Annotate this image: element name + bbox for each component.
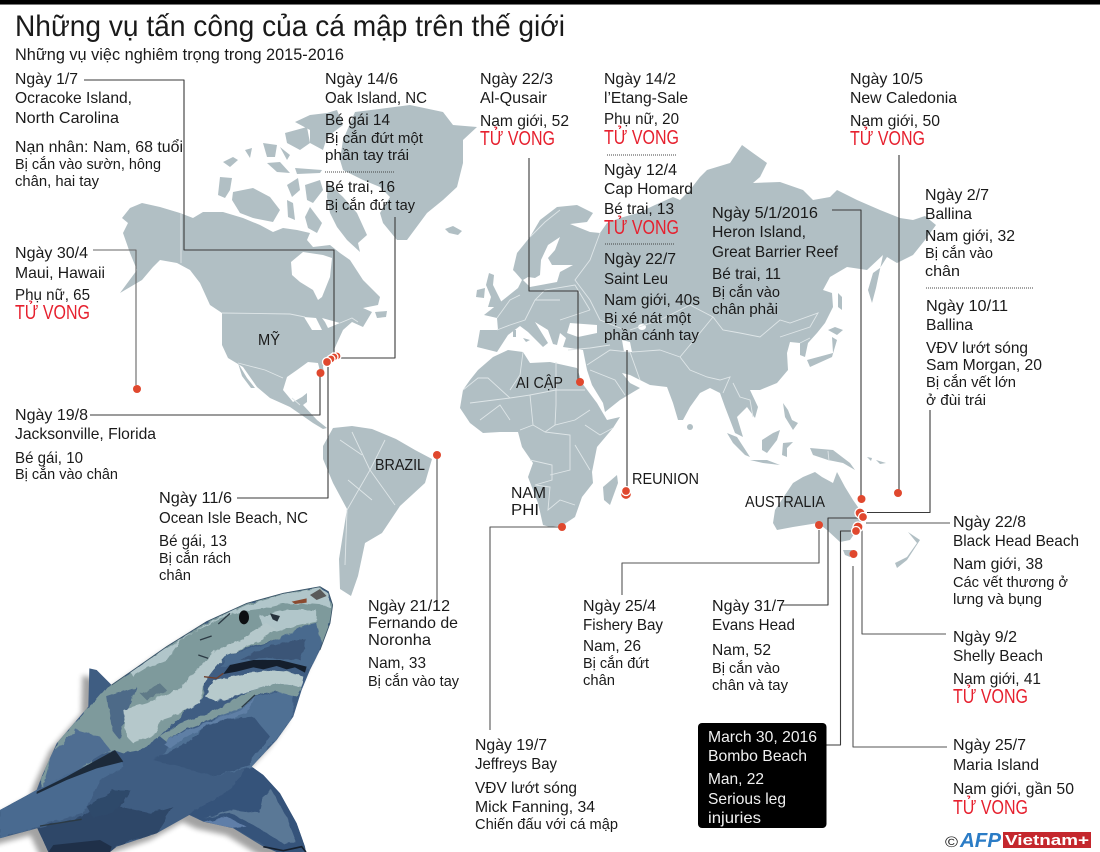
text block: Black Head Beach: Black Head Beach [953,533,1079,550]
shark illustration [0,587,333,852]
country borders [181,210,829,565]
text block: Ocracoke Island [15,71,183,190]
text block: New Caledonia: TỬ VONG [850,126,925,150]
text block: Al-Qusair [480,71,569,150]
text block: Ocracoke Island: chân, hai tay [15,173,99,190]
text block: Ocracoke Island: Bị cắn vào sườn, hông [15,156,161,173]
text block: Maui [15,245,105,324]
text block: Jeffreys Bay: Ngày 19/7 [475,737,547,754]
text block: Ocean Isle Beach: Ngày 11/6 [159,490,232,507]
text block: Fishery Bay: Ngày 25/4 [583,598,656,615]
text block: Ocean Isle Beach: chân [159,567,191,584]
shark body group [0,587,333,852]
country labels: BRAZIL [375,457,425,474]
text block: Ballina [925,187,1042,409]
title: Những vụ tấn công của cá mập trên thế giới [15,10,565,43]
text block: Ocean Isle Beach: Bị cắn rách [159,550,231,567]
text block: Jacksonville: Jacksonville, Florida [15,426,156,443]
shark shadow [0,594,326,852]
credit logos: © [945,834,958,851]
text block: Oak Island [325,71,427,214]
text block: Ocean Isle Beach [159,490,308,584]
credit logos: AFP [959,830,1002,852]
text block: Maui: Maui, Hawaii [15,265,105,282]
text block: Ballina: Ngày 10/11 [926,298,1008,315]
shark base [0,587,333,852]
text block: Evans Head: Ngày 31/7 [712,598,785,615]
shark scars [40,613,255,826]
Southeast Asia islands [783,403,798,430]
shark gill [37,750,123,794]
text block: Ocean Isle Beach: Ocean Isle Beach, NC [159,510,308,527]
text block: Jacksonville: Bé gái, 10 [15,450,83,467]
text block: Fishery Bay: Nam, 26 [583,638,641,655]
text block: Reunion incidents: Cap Homard [604,181,693,198]
text block: Maui: Phụ nữ, 65 [15,287,90,304]
text block: Ballina: Ngày 2/7 [925,187,989,204]
country labels: AUSTRALIA [745,494,825,511]
callout: Bombo Beach: injuries [708,810,761,827]
text block: Ballina: VĐV lướt sóng [926,340,1028,357]
British Isles [486,273,502,307]
Baja California [238,363,255,388]
shark outline [112,587,333,685]
text block: Oak Island: Bị cắn đứt một [325,130,424,147]
text block: Reunion incidents: Bé trai, 13 [604,201,674,218]
text block: Reunion incidents [604,71,700,344]
text block: Fernando de Noronha: Fernando de [368,615,458,632]
text block: Fernando de Noronha: Nam, 33 [368,655,426,672]
text block: Reunion incidents: Ngày 12/4 [604,162,677,179]
text block: Fernando de Noronha: Noronha [368,632,431,649]
text block: Fernando de Noronha [368,598,459,690]
North America [120,203,380,429]
subtitle: Những vụ việc nghiêm trọng trong 2015-2016 [15,46,344,64]
text block: Reunion incidents: Nam giới, 40s [604,292,700,309]
text block: Heron Island: chân phải [712,301,778,318]
text block: Ocracoke Island: Ngày 1/7 [15,71,78,88]
text block: Reunion incidents: phần cánh tay [604,327,699,344]
text block: Reunion incidents: Phụ nữ, 20 [604,111,679,128]
text block: Reunion incidents: TỬ VONG [604,125,679,149]
text block: Fishery Bay [583,598,663,689]
text block: Reunion incidents: Ngày 14/2 [604,71,676,88]
text block: Maria Island: Ngày 25/7 [953,737,1026,754]
text block: New Caledonia: Nam giới, 50 [850,113,940,130]
text block: Maria Island: Nam giới, gần 50 [953,781,1074,798]
text block: Heron Island: Heron Island, [712,224,806,241]
callout: Bombo Beach [698,723,826,828]
text block: Ocracoke Island: Ocracoke Island, [15,90,132,107]
text block: Ballina: Bị cắn vào [925,245,993,262]
text block: Fishery Bay: Fishery Bay [583,617,663,634]
text block: Al-Qusair: Ngày 22/3 [480,71,553,88]
shark tonal patches [0,587,333,852]
shark nostril [270,613,280,622]
text block: New Caledonia: New Caledonia [850,90,957,107]
country labels: NAM [511,485,546,502]
text block: Oak Island: Bé gái 14 [325,112,390,129]
Australia [773,472,862,542]
Mediterranean islands [523,338,530,342]
text block: Evans Head: chân và tay [712,677,788,694]
text block: Ocean Isle Beach: Bé gái, 13 [159,533,227,550]
text block: Shelly Beach: Ngày 9/2 [953,629,1017,646]
credit logos [945,830,1091,852]
Arctic islands [218,177,232,198]
text block: New Caledonia: Ngày 10/5 [850,71,923,88]
text block: Fernando de Noronha: Ngày 21/12 [368,598,450,615]
text block: Reunion incidents: Saint Leu [604,271,668,288]
text block: Oak Island: Bé trai, 16 [325,179,395,196]
shark fin edge [263,847,306,852]
text block: Shelly Beach: Nam giới, 41 [953,671,1041,688]
text block: Oak Island: Oak Island, NC [325,90,427,107]
text block: Al-Qusair: TỬ VONG [480,126,555,150]
text block: Fishery Bay: Bị cắn đứt [583,655,650,672]
Eurasia [477,145,936,437]
text block: Maria Island: Maria Island [953,757,1039,774]
leader lines [84,80,950,747]
Greenland [340,105,477,240]
country labels [258,329,825,519]
text block: Shelly Beach: Shelly Beach [953,648,1043,665]
text block: Fernando de Noronha: Bị cắn vào tay [368,673,459,690]
Africa [460,350,620,527]
text block: Shelly Beach: TỬ VONG [953,684,1028,708]
text block: Evans Head [712,598,795,694]
text block: Ballina: ở đùi trái [926,392,986,409]
text block: Reunion incidents: TỬ VONG [604,215,679,239]
text block: Black Head Beach: Các vết thương ở [953,574,1068,591]
text block: Oak Island: phần tay trái [325,147,409,164]
text block: Evans Head: Nam, 52 [712,642,771,659]
text block: Evans Head: Bị cắn vào [712,660,780,677]
text block: Maria Island [953,737,1074,819]
text block: Jeffreys Bay [475,737,618,833]
text block: Oak Island: Ngày 14/6 [325,71,398,88]
shark eye [239,610,249,624]
text block: Al-Qusair: Nam giới, 52 [480,113,569,130]
callout: Bombo Beach: Bombo Beach [708,748,807,765]
shark mouth corner [204,673,223,678]
text block: Ballina: Bị cắn vết lớn [926,374,1016,391]
South America [323,426,432,596]
text block: Jacksonville [15,407,156,483]
text block: Heron Island: Great Barrier Reef [712,244,839,261]
text block: Ballina: chân [925,263,960,280]
text block: Reunion incidents: l’Etang-Sale [604,90,688,107]
text block: Jeffreys Bay: Jeffreys Bay [475,756,557,773]
text block: Jeffreys Bay: VĐV lướt sóng [475,780,577,797]
country labels: MỸ [258,329,280,349]
Iceland [445,226,462,235]
text block: Black Head Beach: Ngày 22/8 [953,514,1026,531]
country labels: PHI [511,502,539,519]
text block: Fishery Bay: chân [583,672,615,689]
callout: Bombo Beach: Serious leg [708,791,786,808]
text block: Shelly Beach [953,629,1043,708]
Newfoundland [375,311,387,318]
text block: Heron Island: Bé trai, 11 [712,266,781,283]
text block: Black Head Beach: Nam giới, 38 [953,556,1043,573]
shark mouth [223,660,307,674]
text block: Ballina: Ballina [925,206,972,223]
shark belly tip [48,840,112,852]
lakes and inland seas [291,237,646,352]
Madagascar [603,475,618,505]
incident markers [133,352,902,558]
text block: Black Head Beach [953,514,1079,608]
callout: Bombo Beach: Man, 22 [708,771,764,788]
text block: Ballina: Sam Morgan, 20 [926,357,1042,374]
New Zealand [895,532,920,568]
country labels: REUNION [632,471,699,488]
text block: Reunion incidents: Ngày 22/7 [604,251,676,268]
text block: Heron Island: Ngày 5/1/2016 [712,205,818,222]
text block: Jeffreys Bay: Mick Fanning, 34 [475,799,595,816]
text block: Black Head Beach: lưng và bụng [953,591,1042,608]
callout: Bombo Beach: March 30, 2016 [708,729,817,746]
text block: Al-Qusair: Al-Qusair [480,90,548,107]
Sakhalin and Japan [838,293,842,310]
text block: Jacksonville: Bị cắn vào chân [15,466,118,483]
shark wounds [292,589,327,604]
text block: Ocracoke Island: Nạn nhân: Nam, 68 tuổi [15,138,183,156]
text block: Jacksonville: Ngày 19/8 [15,407,88,424]
text block: Oak Island: Bị cắn đứt tay [325,197,415,214]
top bar [0,0,1100,5]
text block: Maria Island: TỬ VONG [953,795,1028,819]
text block: Reunion incidents: Bị xé nát một [604,310,692,327]
text block: Jeffreys Bay: Chiến đấu với cá mập [475,816,618,833]
text block: Ballina: Nam giới, 32 [925,228,1015,245]
text block: Ocracoke Island: North Carolina [15,110,119,127]
text block: Maui: Ngày 30/4 [15,245,88,262]
text block: Maui: TỬ VONG [15,300,90,324]
text block: Heron Island [712,205,839,318]
country labels: AI CẬP [516,373,563,392]
text block: Evans Head: Evans Head [712,617,795,634]
text block: Heron Island: Bị cắn vào [712,284,780,301]
text block: Ballina: Ballina [926,317,973,334]
credit logos: Vietnam+ [1005,832,1089,849]
text block: New Caledonia [850,71,957,150]
world map [120,105,936,596]
